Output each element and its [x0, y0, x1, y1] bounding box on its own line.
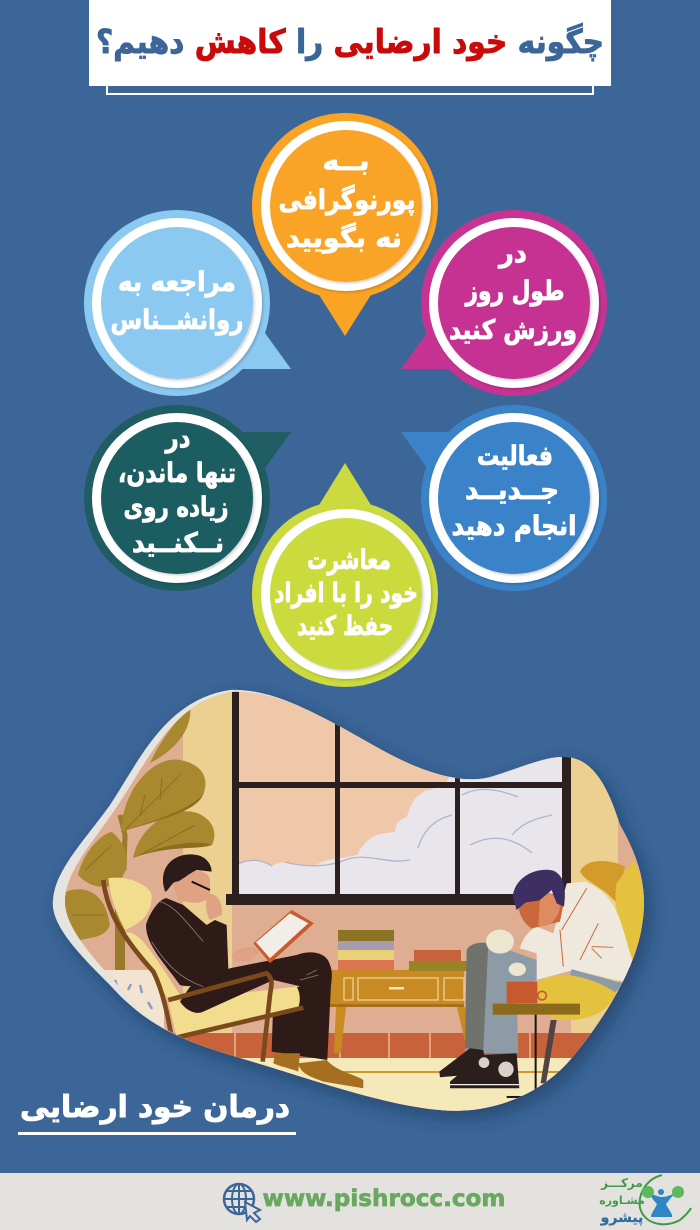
sweater	[520, 882, 633, 982]
logo text: مشـاوره	[599, 1194, 645, 1207]
speckled stool	[104, 970, 164, 1028]
bubble text: blue: انجام دهید	[452, 511, 576, 542]
caption underline	[18, 1132, 296, 1135]
icon: globe with cursor	[224, 1184, 260, 1222]
bubble: light blue	[84, 210, 291, 396]
bubble: magenta	[401, 210, 607, 396]
distressed client	[439, 860, 644, 1098]
bubble text: teal	[118, 423, 236, 559]
title: چگونه خود ارضایی را کاهش دهیم؟	[96, 22, 604, 62]
bubble text: lime	[274, 545, 418, 642]
bubble text: teal: در	[164, 423, 190, 454]
seated counsellor	[103, 854, 363, 1088]
bubble text: lime: حفظ کنید	[297, 611, 393, 642]
bubble: teal	[84, 405, 291, 591]
bubble: blue	[401, 405, 607, 591]
armchair	[580, 861, 625, 903]
bubble text: lime: خود را با افراد	[274, 578, 418, 609]
bubble text: blue: فعالیت	[477, 441, 553, 472]
shoes	[273, 1053, 363, 1088]
blob frame	[53, 690, 644, 1111]
table and books	[330, 930, 471, 1053]
bubble: lime	[252, 463, 438, 687]
armrest	[168, 973, 303, 1062]
bubble text: orange: نه بگویید	[286, 222, 402, 254]
head	[163, 854, 222, 920]
sneakers	[439, 1048, 487, 1077]
illustration: therapy scene	[50, 685, 650, 1118]
scene	[50, 685, 650, 1118]
logo text	[599, 1176, 645, 1226]
logo	[599, 1175, 691, 1226]
footer	[0, 1173, 700, 1230]
bubble text: lime: معاشرت	[307, 545, 391, 576]
bubble text: teal: زیاده روی	[124, 492, 228, 523]
window frame	[226, 685, 571, 905]
bubble text: blue: جــدیــد	[465, 475, 559, 506]
bubble text: teal: نــکنــید	[132, 528, 224, 559]
bubble text: teal: تنها ماندن،	[118, 458, 236, 489]
bubble text: magenta: در	[497, 238, 527, 269]
head and hands	[518, 897, 565, 928]
bubble: orange	[252, 113, 438, 336]
bubble text: orange	[278, 146, 416, 254]
bubble text: light blue	[110, 267, 244, 336]
jeans	[465, 943, 537, 1053]
plant	[64, 705, 214, 970]
title panel	[89, 0, 611, 94]
bubble text: orange: پورنوگرافی	[278, 184, 416, 216]
logo text: مرکـــز	[600, 1176, 643, 1190]
tiles and floor	[173, 1033, 592, 1111]
jacket	[146, 898, 228, 986]
caption: درمان خود ارضایی	[20, 1090, 290, 1125]
bubble text: blue	[452, 441, 576, 542]
bubble text: light blue: روانشــناس	[110, 305, 244, 336]
thigh	[180, 952, 332, 1013]
bubble text: magenta: ورزش کنید	[449, 315, 577, 346]
chair	[103, 878, 300, 1038]
website url: www.pishrocc.com	[262, 1186, 506, 1212]
clipboard	[232, 910, 314, 963]
bubble text: magenta	[449, 238, 577, 346]
logo text: پیشرو	[600, 1210, 643, 1226]
bubble text: light blue: مراجعه به	[118, 267, 236, 298]
cup and side table	[507, 982, 537, 1003]
clouds	[238, 757, 562, 900]
shin	[272, 972, 332, 1060]
bubble text: orange: بــه	[322, 146, 370, 177]
bubble text: magenta: طول روز	[464, 276, 564, 307]
